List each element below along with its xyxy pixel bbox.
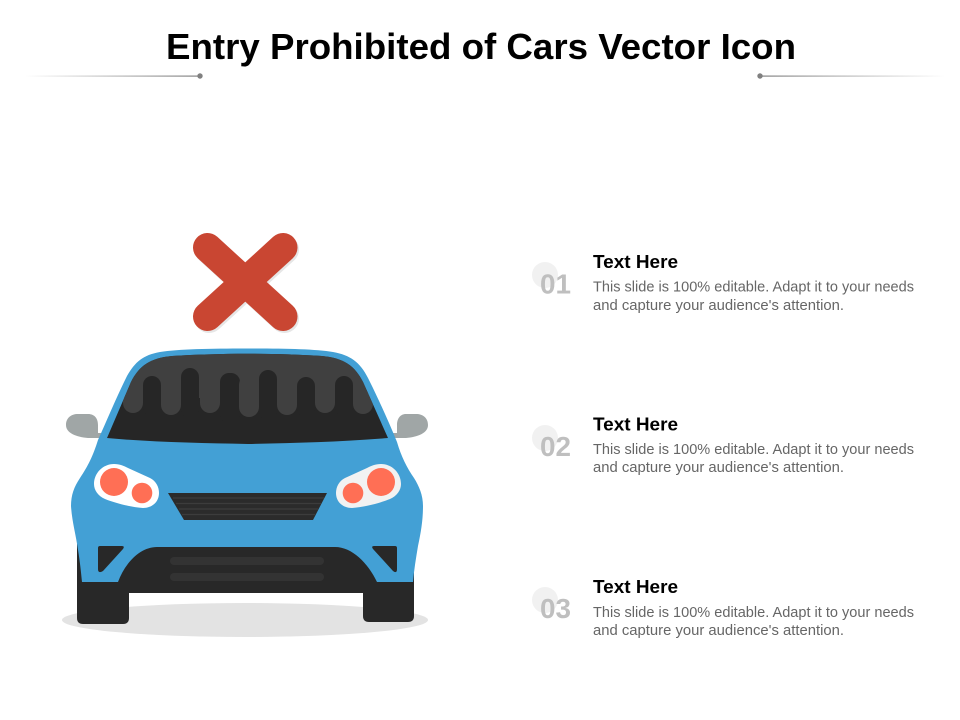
description 02: This slide is 100% editable. Adapt it to your needs <box>593 442 914 458</box>
title divider right <box>757 73 945 79</box>
lower intake slats <box>170 557 324 581</box>
description 03: and capture your audience's attention. <box>593 623 844 639</box>
description 02: and capture your audience's attention. <box>593 460 844 476</box>
description 03: This slide is 100% editable. Adapt it to your needs <box>593 605 914 621</box>
lower bumper <box>110 540 385 593</box>
left fog vent <box>98 546 124 572</box>
windshield <box>107 354 388 444</box>
title: Entry Prohibited of Cars Vector Icon <box>166 26 796 67</box>
number 02 <box>532 425 571 462</box>
heading 01: Text Here <box>593 252 678 272</box>
number 01: 01 <box>540 268 571 300</box>
right fog vent <box>372 546 397 572</box>
number 03: 03 <box>540 593 571 624</box>
description 02 <box>593 442 914 476</box>
right wheel <box>363 540 414 622</box>
description 01 <box>593 280 914 314</box>
ground shadow <box>62 603 428 637</box>
heading 02: Text Here <box>593 414 678 434</box>
number 03 <box>532 587 571 624</box>
description 01: This slide is 100% editable. Adapt it to your needs <box>593 280 914 296</box>
heading 03: Text Here <box>593 577 678 597</box>
item 01 <box>532 252 914 314</box>
description 01: and capture your audience's attention. <box>593 298 844 314</box>
description 03 <box>593 605 914 639</box>
wiper reflections <box>143 368 353 398</box>
title divider left <box>25 73 203 79</box>
left wheel <box>77 540 129 624</box>
item 03 <box>532 577 914 639</box>
front grille <box>168 493 327 520</box>
car body <box>71 348 423 582</box>
right headlight <box>336 464 401 508</box>
left headlight <box>94 464 159 508</box>
number 01 <box>532 262 571 300</box>
number 02: 02 <box>540 431 571 462</box>
icon: red cross <box>208 248 284 318</box>
left mirror <box>66 414 108 438</box>
right mirror <box>387 414 428 438</box>
item 02 <box>532 414 914 476</box>
illustration: car <box>62 348 428 637</box>
